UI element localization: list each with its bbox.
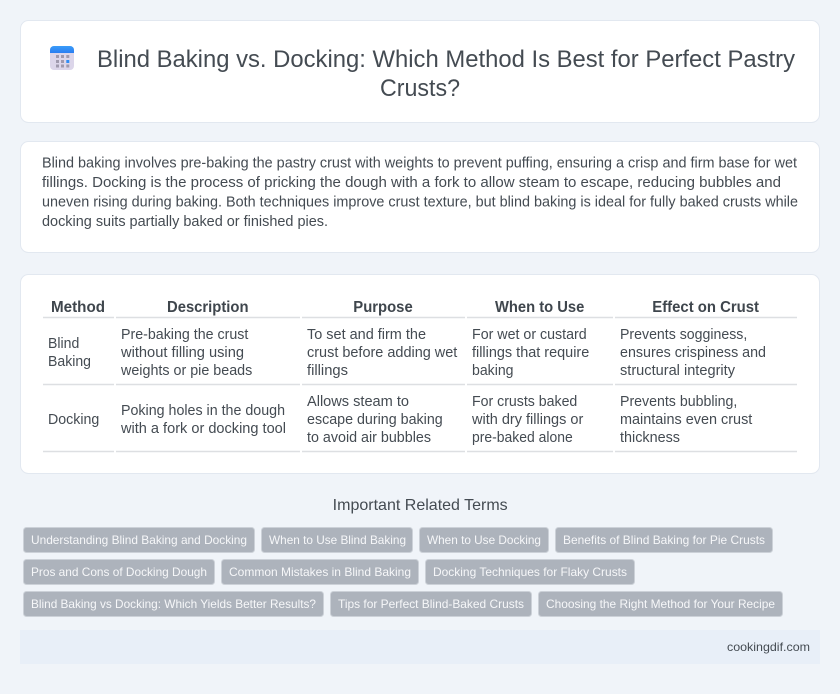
- footer: [20, 630, 820, 664]
- table header: [51, 299, 760, 316]
- table row: docking: pre-baked alone: [472, 430, 573, 446]
- table row: docking: Allows steam to: [307, 394, 409, 410]
- table row: blind baking: without filling using: [120, 345, 244, 361]
- table row: docking: For crusts baked: [472, 394, 577, 410]
- table row: docking: to avoid air bubbles: [307, 430, 431, 446]
- table row: blind baking: weights or pie beads: [120, 363, 252, 379]
- title text: [97, 46, 795, 102]
- table header: When to Use: [495, 299, 584, 316]
- footer: cookingdif.com: [727, 640, 810, 654]
- table row: blind baking: Baking: [48, 354, 91, 370]
- title text: Blind Baking vs. Docking: Which Method Is Best for Perfect Pastry: [97, 46, 795, 73]
- table row: docking: Poking holes in the dough: [121, 403, 285, 419]
- related term tags: [24, 528, 782, 616]
- title text: Crusts?: [380, 75, 460, 102]
- icon: calendar: [50, 46, 74, 70]
- intro paragraph: docking suits partially baked or finished pies.: [42, 214, 328, 230]
- table row: blind baking: Pre-baking the crust: [121, 327, 248, 343]
- related term tags: When to Use Docking: [427, 533, 541, 547]
- related term tags: Tips for Perfect Blind-Baked Crusts: [338, 597, 524, 611]
- table row: blind baking: structural integrity: [620, 363, 736, 379]
- related term tags: Understanding Blind Baking and Docking: [31, 533, 247, 547]
- table header: Method: [51, 299, 105, 316]
- table row: blind baking: Prevents sogginess,: [620, 327, 747, 343]
- related term tags: When to Use Blind Baking: [269, 533, 406, 547]
- panel: comparison table: [20, 274, 820, 474]
- intro paragraph: [42, 155, 798, 230]
- table row: docking: Docking: [48, 412, 99, 428]
- table header: Effect on Crust: [652, 299, 760, 316]
- table row: blind baking: Blind: [48, 336, 79, 352]
- related term tags: Benefits of Blind Baking for Pie Crusts: [563, 533, 765, 547]
- heading: important related terms: Important Related Terms: [333, 497, 508, 514]
- table row: docking: escape during baking: [307, 412, 443, 428]
- intro paragraph: fillings. Docking is the process of pricking the dough with a fork to allow steam to escape, reducing bubbles and: [42, 175, 781, 191]
- table row: docking: [48, 394, 752, 446]
- table row: docking: with a fork or docking tool: [120, 421, 286, 437]
- related term tags: Common Mistakes in Blind Baking: [229, 565, 411, 579]
- related term tags: Pros and Cons of Docking Dough: [31, 565, 207, 579]
- table row: blind baking: For wet or custard: [472, 327, 587, 343]
- table row: blind baking: ensures crispiness and: [620, 345, 766, 361]
- table row: blind baking: crust before adding wet: [307, 345, 457, 361]
- table row: docking: Prevents bubbling,: [620, 394, 737, 410]
- table row: blind baking: fillings: [307, 363, 348, 379]
- table row: blind baking: baking: [472, 363, 514, 379]
- intro paragraph: uneven rising during baking. Both techniques improve crust texture, but blind baking is ideal for fully baked crusts while: [42, 195, 798, 211]
- related term tags: Docking Techniques for Flaky Crusts: [433, 565, 627, 579]
- related term tags: Blind Baking vs Docking: Which Yields Better Results?: [31, 597, 316, 611]
- table header: Description: [167, 299, 248, 316]
- panel: introduction: [20, 142, 820, 252]
- table row: blind baking: To set and firm the: [307, 327, 426, 343]
- table row: blind baking: [48, 327, 766, 379]
- related term tags: Choosing the Right Method for Your Recipe: [546, 597, 775, 611]
- intro paragraph: Blind baking involves pre-baking the pastry crust with weights to prevent puffing, ensuring a crisp and firm base for wet: [42, 155, 797, 171]
- table header: Purpose: [353, 299, 413, 316]
- table row: blind baking: fillings that require: [472, 345, 589, 361]
- table row: docking: maintains even crust: [620, 412, 752, 428]
- table row: docking: thickness: [620, 430, 680, 446]
- table row: docking: with dry fillings or: [471, 412, 583, 428]
- panel: title: [20, 20, 820, 122]
